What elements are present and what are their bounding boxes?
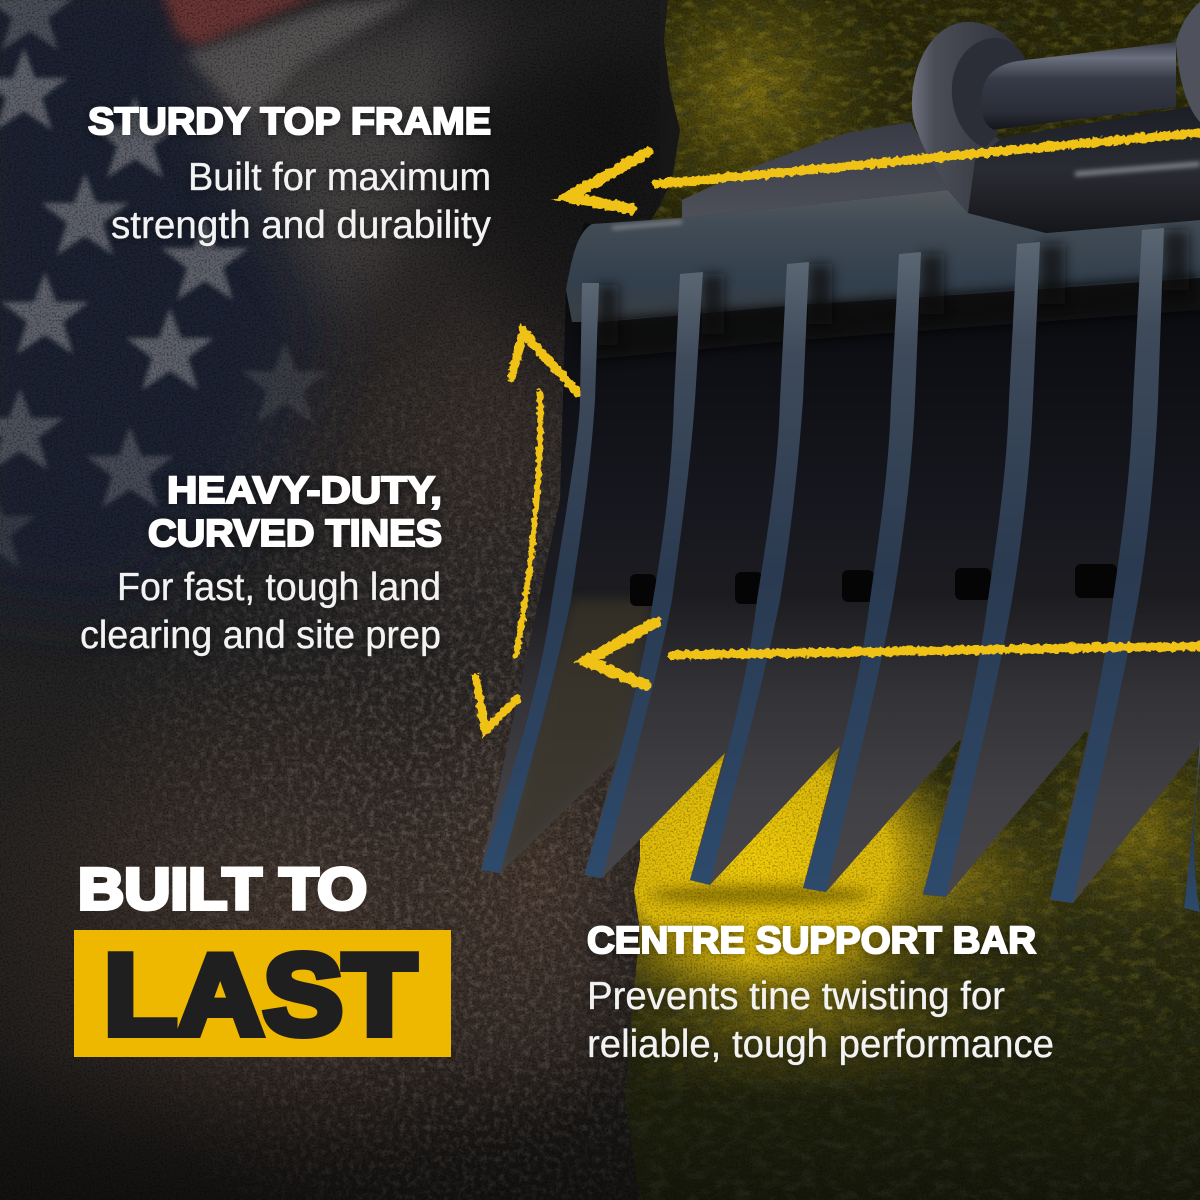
shadow below frame xyxy=(586,276,1200,360)
olive tint on first side plate xyxy=(500,600,653,873)
shadows beside tine tops xyxy=(598,230,1189,345)
arrow: to top frame xyxy=(568,133,1200,209)
callout: centre support bar xyxy=(587,920,1054,1066)
gusset plate xyxy=(682,122,948,218)
yellow title box xyxy=(74,930,451,1057)
rake attachment xyxy=(481,2,1200,912)
shadows under tine tips xyxy=(650,885,870,905)
arrow: to centre support bar xyxy=(586,622,1200,685)
description: Prevents tine twisting for xyxy=(587,975,1005,1018)
callout: heavy-duty curved tines: CURVED TINES xyxy=(148,513,442,555)
bracket top highlight xyxy=(1075,164,1200,174)
callout: sturdy top frame xyxy=(88,101,491,247)
top frame bar xyxy=(566,190,1200,322)
outer disc flange xyxy=(912,22,1025,213)
callout: heavy-duty curved tines xyxy=(80,470,442,657)
bolts on centre bar xyxy=(630,564,1117,606)
right flange xyxy=(1176,2,1200,122)
description: For fast, tough land xyxy=(117,566,441,609)
rake main body with side plates xyxy=(481,200,1200,903)
background: dark left grunge with American flag xyxy=(0,0,660,1200)
callout: sturdy top frame: strength and durability xyxy=(111,204,491,247)
title line one: BUILT TO xyxy=(78,857,367,922)
callout: heavy-duty curved tines: clearing and site prep xyxy=(80,614,441,657)
right bracket block xyxy=(925,105,1200,233)
arrows xyxy=(476,133,1200,731)
callout: centre support bar: reliable, tough performance xyxy=(587,1023,1054,1066)
heading: STURDY TOP FRAME xyxy=(88,101,491,143)
title: built to last xyxy=(74,857,451,1059)
description: Built for maximum xyxy=(188,156,491,199)
tines xyxy=(481,228,1200,912)
cylinder pin xyxy=(979,42,1176,130)
heading: HEAVY-DUTY, xyxy=(167,470,442,512)
background: yellow grunge paint on the right xyxy=(625,0,1200,1200)
title line two: LAST xyxy=(104,932,416,1059)
heading: CENTRE SUPPORT BAR xyxy=(587,920,1036,962)
arrow: along curved tines xyxy=(476,332,577,731)
frame top highlight xyxy=(612,222,682,228)
inner ring xyxy=(952,38,1026,148)
